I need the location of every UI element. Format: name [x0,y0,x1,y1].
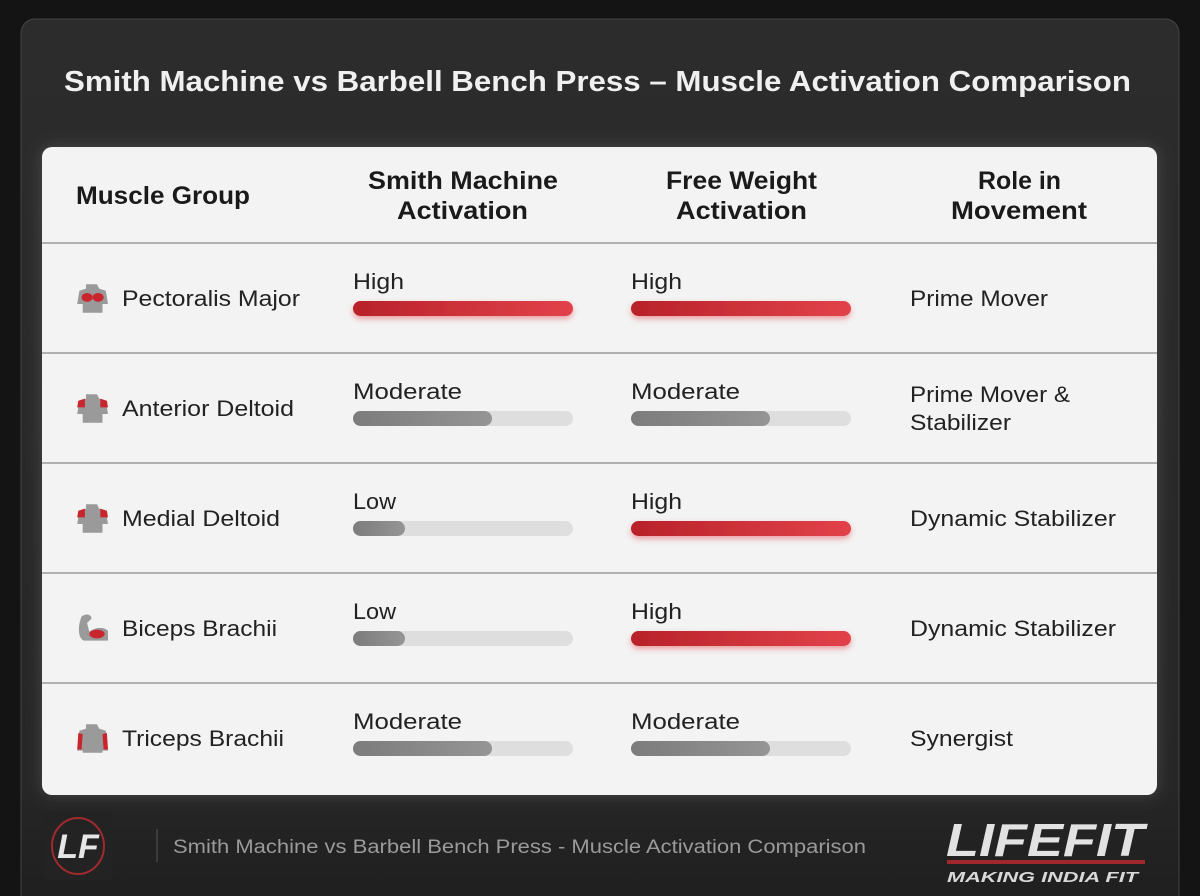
table header: Muscle Group [76,182,250,210]
row: anterior deltoid: Moderate [631,379,740,404]
table header: Free Weight [666,167,818,195]
brand logo: MAKING INDIA FIT [947,869,1141,886]
row: medial deltoid: Low [353,489,396,514]
icon: LF logo: LF [57,828,100,866]
row: pectoralis major: Prime Mover [910,286,1048,311]
row: triceps brachii [77,709,1013,756]
row: triceps brachii: Moderate [631,709,740,734]
icon: back arms [77,724,108,753]
table header: Activation [397,197,528,225]
row: anterior deltoid [77,379,1070,435]
row: medial deltoid: Medial Deltoid [122,506,280,531]
row: medial deltoid: Dynamic Stabilizer [910,506,1116,531]
brand logo: LIFEFIT [946,814,1149,866]
row: biceps brachii [79,599,1116,646]
row: biceps brachii: High [631,599,682,624]
row: pectoralis major: High [631,269,682,294]
row: triceps brachii: Triceps Brachii [122,726,284,751]
panel: comparison table [42,147,1157,795]
icon: chest [77,284,108,313]
row: biceps brachii: Low [353,599,396,624]
row: triceps brachii: Synergist [910,726,1013,751]
table header: Smith Machine [368,167,558,195]
footer [44,812,1149,886]
row: pectoralis major: High [353,269,404,294]
icon: flexed arm [79,614,108,641]
icon: shoulders front [77,394,108,423]
row: triceps brachii: Moderate [353,709,462,734]
row: anterior deltoid: Prime Mover & [910,382,1070,407]
footer caption: Smith Machine vs Barbell Bench Press - Muscle Activation Comparison [173,837,866,858]
row: biceps brachii: Biceps Brachii [122,616,277,641]
title: Smith Machine vs Barbell Bench Press – Muscle Activation Comparison [64,66,1131,98]
table header: Movement [951,197,1088,225]
table header [76,167,1088,225]
brand logo [946,814,1149,886]
row: medial deltoid: High [631,489,682,514]
row: anterior deltoid: Moderate [353,379,462,404]
row: anterior deltoid: Stabilizer [910,410,1011,435]
row: pectoralis major [77,269,1048,316]
icon: shoulders back [77,504,108,533]
table header: Activation [676,197,807,225]
row: medial deltoid [77,489,1116,536]
row: biceps brachii: Dynamic Stabilizer [910,616,1116,641]
icon: LF logo [44,812,112,880]
row: pectoralis major: Pectoralis Major [122,286,300,311]
table header: Role in [978,167,1061,195]
row: anterior deltoid: Anterior Deltoid [122,396,294,421]
